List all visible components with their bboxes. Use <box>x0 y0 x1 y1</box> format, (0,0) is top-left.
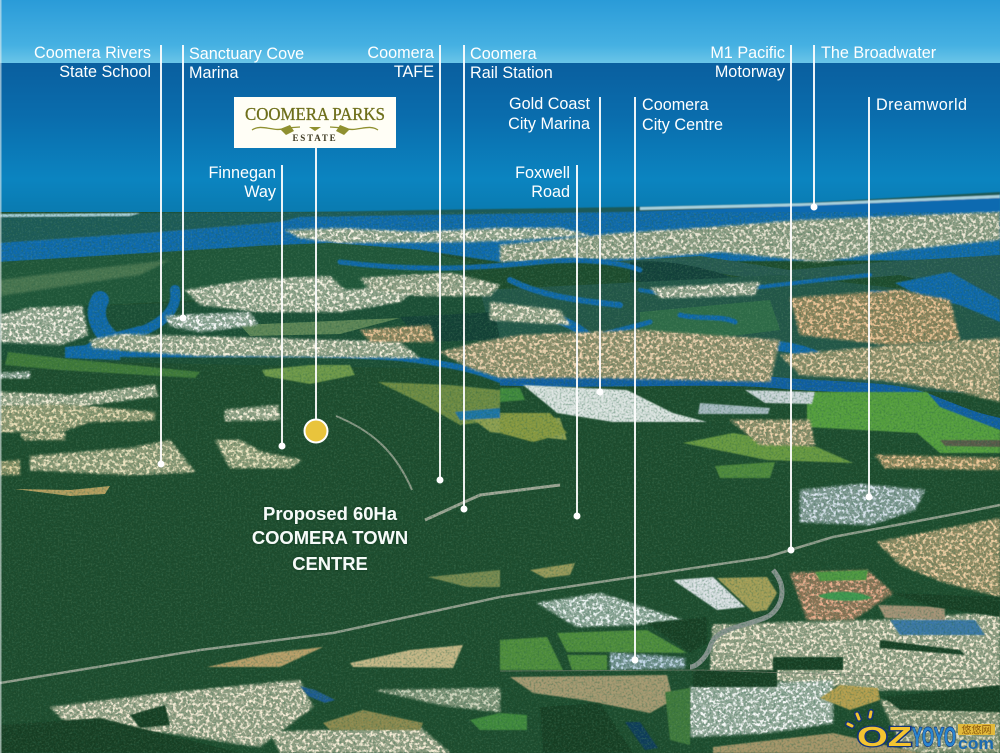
label: Coomera City Centre: City Centre <box>642 116 723 134</box>
leader lines <box>158 45 872 664</box>
label: Coomera City Centre: Coomera <box>642 96 709 114</box>
watermark: OZYOYO logo: OZ <box>857 721 912 752</box>
label: Gold Coast City Marina: Gold Coast <box>509 95 590 113</box>
mid-distance suburb underlay <box>480 275 1000 395</box>
mid-distance land <box>0 243 470 310</box>
label: Coomera TAFE: Coomera <box>367 44 434 62</box>
sky <box>0 0 1000 64</box>
Dreamworld and right suburbs <box>50 484 1000 753</box>
label: Gold Coast City Marina: City Marina <box>508 115 590 133</box>
logo: Coomera Parks Estate <box>234 97 396 148</box>
far suburbs <box>285 212 1000 262</box>
watermark: OZYOYO logo: YOYO <box>912 722 956 752</box>
label: Coomera Rivers State School: Coomera Rivers <box>34 44 151 62</box>
dark forest blocks <box>0 593 1000 753</box>
ocean <box>0 63 1000 218</box>
label: Proposed 60Ha Coomera Town Centre: CENTRE <box>292 553 368 574</box>
far spit and broadwater <box>0 192 1000 262</box>
farmland <box>683 392 1000 478</box>
label: Foxwell Road: Foxwell <box>515 164 570 182</box>
label: Dreamworld: Dreamworld <box>876 96 967 114</box>
watermark: OZYOYO logo <box>848 712 995 753</box>
label: Sanctuary Cove Marina: Sanctuary Cove <box>189 45 304 63</box>
sand patch <box>15 486 110 496</box>
label: Finnegan Way: Way <box>244 183 277 201</box>
left edge stripe <box>0 0 2 753</box>
label: Coomera Rivers State School: State School <box>59 63 151 81</box>
label: Proposed 60Ha Coomera Town Centre: Proposed 60Ha <box>263 503 397 524</box>
label: Coomera TAFE: TAFE <box>394 63 434 81</box>
watermark: OZYOYO logo: com <box>958 734 994 753</box>
watermark: OZYOYO logo: 悠悠网 <box>962 722 992 736</box>
rivers and canals <box>70 260 870 380</box>
label: M1 Pacific Motorway: M1 Pacific <box>710 44 785 62</box>
forest texture <box>0 212 1000 753</box>
main river <box>500 380 1000 424</box>
logo: Coomera Parks Estate: COOMERA PARKS <box>245 104 385 124</box>
label: Proposed 60Ha Coomera Town Centre: COOMERA TOWN <box>252 527 408 548</box>
riverside green fields <box>5 352 567 442</box>
marina and industrial precinct <box>523 385 815 422</box>
roads and motorway <box>0 416 1000 683</box>
label: Finnegan Way: Finnegan <box>208 164 276 182</box>
site marker <box>304 420 328 442</box>
label: Coomera Rail Station: Rail Station <box>470 64 553 82</box>
label: The Broadwater: The Broadwater <box>821 44 937 62</box>
foreground lots and fields <box>207 563 985 753</box>
logo: Coomera Parks Estate: ESTATE <box>293 133 337 143</box>
waterside suburbs <box>0 273 1000 475</box>
forest base <box>0 212 1000 753</box>
label: M1 Pacific Motorway: Motorway <box>715 63 786 81</box>
label: Foxwell Road: Road <box>531 183 570 201</box>
label: Coomera Rail Station: Coomera <box>470 45 537 63</box>
label: Sanctuary Cove Marina: Marina <box>189 64 238 82</box>
